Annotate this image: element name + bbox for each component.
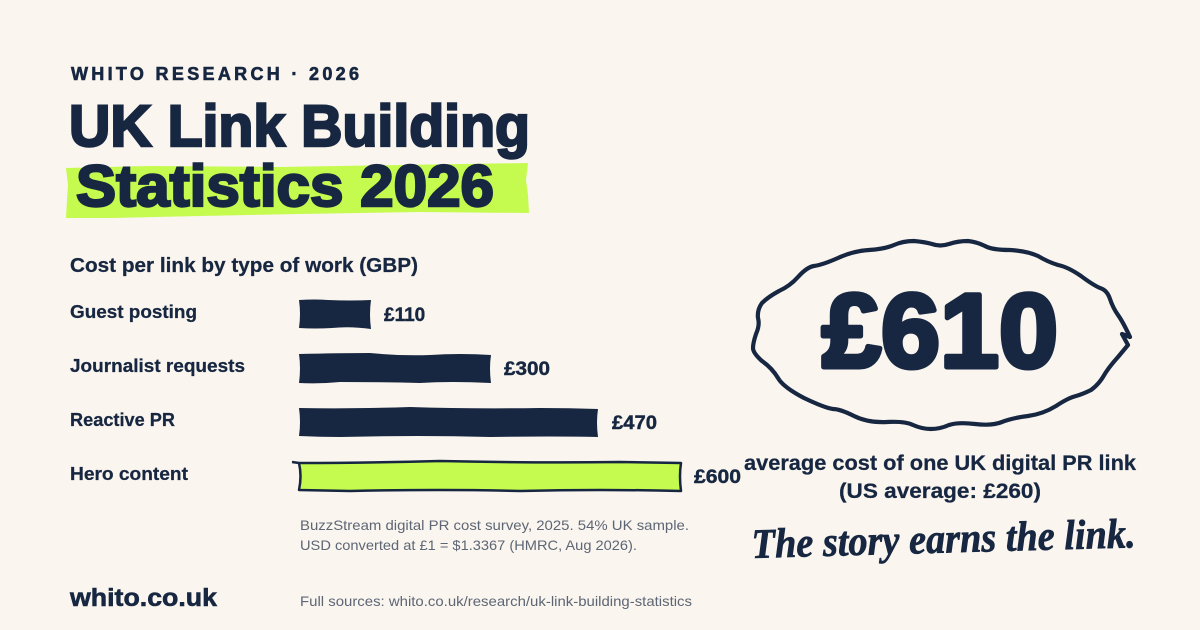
row: Guest posting <box>70 300 425 329</box>
row: Hero content (highlighted): £600 <box>694 467 741 488</box>
row: Hero content (highlighted) <box>70 461 741 491</box>
title highlight: lime brush stripe <box>66 163 529 218</box>
row: Journalist requests: £300 <box>504 359 550 380</box>
source note: BuzzStream digital PR cost survey, 2025. 54% UK sample. <box>300 517 689 533</box>
hero stat: £610 in hand-drawn outline: £610 <box>822 273 1058 390</box>
row: Reactive PR: £470 <box>612 413 657 434</box>
row: Journalist requests <box>70 353 550 383</box>
chart heading: Cost per link by type of work (GBP) <box>70 255 418 277</box>
title: UK Link Building <box>69 94 530 159</box>
title: Statistics 2026 <box>76 154 494 219</box>
bar chart: cost per link <box>70 300 741 491</box>
footer: website: whito.co.uk <box>69 584 217 612</box>
stat caption: (US average: £260) <box>839 480 1041 503</box>
eyebrow: Whito Research 2026: WHITO RESEARCH · 2026 <box>71 64 359 84</box>
row: Hero content (highlighted): Hero content <box>70 464 188 484</box>
hand-drawn oval outline <box>753 241 1130 429</box>
row: Guest posting: Guest posting <box>70 302 197 322</box>
source note: USD converted at £1 = $1.3367 (HMRC, Aug 2026). <box>300 537 637 553</box>
row: Reactive PR <box>70 407 657 437</box>
tagline: The story earns the link. <box>751 511 1136 568</box>
stat caption: average cost of one UK digital PR link <box>744 452 1136 475</box>
title <box>66 94 530 219</box>
row: Guest posting: £110 <box>384 305 425 326</box>
source note <box>300 517 689 553</box>
stat caption <box>744 452 1136 503</box>
row: Reactive PR: Reactive PR <box>70 410 175 430</box>
hero stat: £610 in hand-drawn outline <box>753 241 1130 429</box>
row: Journalist requests: Journalist requests <box>70 356 245 376</box>
footer: sources: Full sources: whito.co.uk/research/uk-link-building-statistics <box>300 593 692 609</box>
